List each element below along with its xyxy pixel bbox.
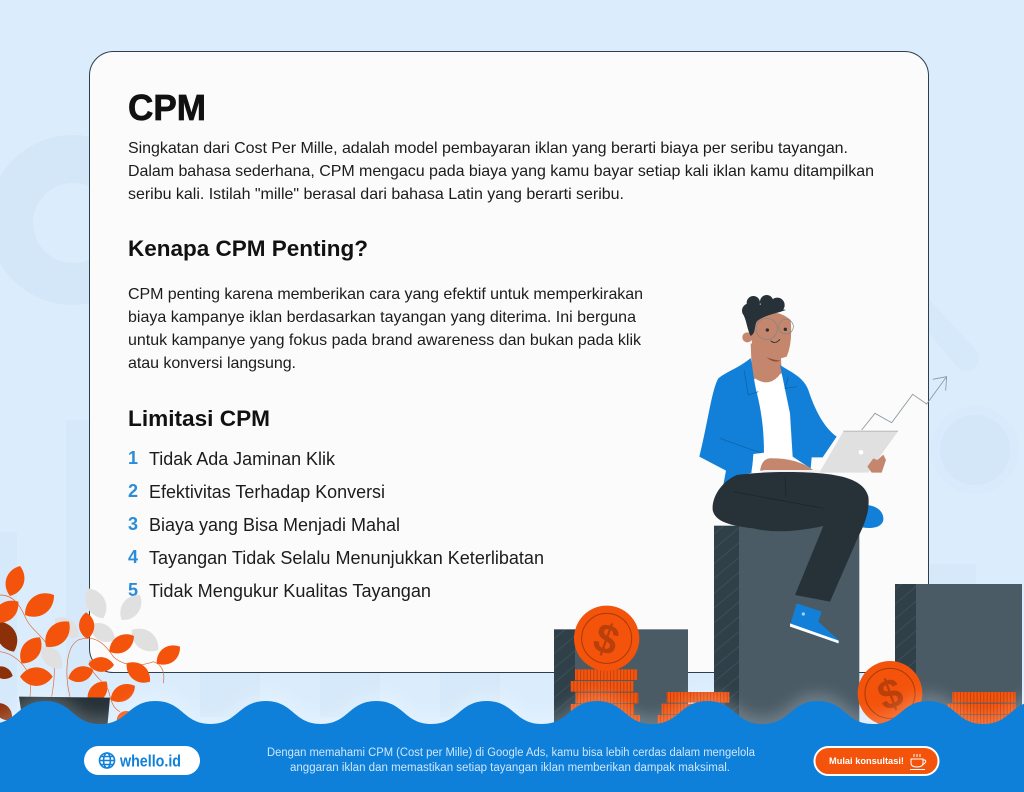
front hand (760, 458, 814, 471)
list: CPM limitations: Tidak Mengukur Kualitas Tayangan (149, 581, 431, 601)
text block: why CPM matters: CPM penting karena memberikan cara yang efektif untuk memperkirakan (128, 286, 643, 303)
coin lower (858, 661, 922, 726)
footer message: anggaran iklan dan memastikan setiap tayangan iklan memberikan dampak maksimal. (290, 762, 730, 774)
coin stack right (947, 692, 1016, 726)
neck (751, 343, 782, 383)
list: CPM limitations: 3 (128, 514, 138, 534)
coin upper: $ (588, 613, 625, 665)
list: CPM limitations: Biaya yang Bisa Menjadi Mahal (149, 515, 400, 535)
text block: CPM definition (128, 140, 874, 203)
heading: Kenapa CPM Penting: Kenapa CPM Penting? (128, 236, 368, 261)
front shoe (790, 603, 838, 643)
glasses (756, 318, 793, 340)
list: CPM limitations: 2 (128, 481, 138, 501)
footer band with wave (0, 701, 1024, 792)
list: CPM limitations: 4 (128, 547, 138, 567)
jacket (699, 358, 764, 488)
shirt (755, 373, 793, 460)
logo pill: whello.id (84, 746, 200, 775)
panel: main card (90, 52, 928, 672)
coin upper (574, 606, 639, 671)
coin lower: $ (871, 668, 909, 720)
arrow: growth line (862, 377, 947, 430)
white cuff (751, 453, 764, 473)
ear (742, 332, 752, 342)
footer message (267, 747, 756, 774)
trousers (713, 472, 869, 602)
head (749, 312, 791, 360)
list: CPM limitations: Efektivitas Terhadap Konversi (149, 482, 385, 502)
middle building (714, 526, 859, 729)
button: Mulai konsultasi (814, 747, 938, 775)
hair (742, 295, 786, 336)
wave glow (0, 693, 1024, 792)
text block: why CPM matters: untuk kampanye yang fokus pada brand awareness dan bukan pada klik (128, 332, 642, 349)
heading: Limitasi CPM: Limitasi CPM (128, 406, 270, 431)
text block: why CPM matters (128, 286, 643, 372)
list: CPM limitations: 1 (128, 448, 138, 468)
dark leaves (0, 618, 23, 725)
back hand (867, 455, 886, 473)
grey back leaves (35, 584, 164, 674)
text block: CPM definition: seribu kali. Istilah "mille" berasal dari bahasa Latin yang berarti seribu. (128, 186, 624, 203)
text block: CPM definition: Singkatan dari Cost Per Mille, adalah model pembayaran iklan yang berarti biaya per seribu tayangan. (128, 140, 848, 157)
illustration: buildings, coins and person (554, 295, 1022, 729)
coin stack left (571, 669, 640, 726)
icon: coffee cup (910, 754, 926, 770)
person (699, 295, 898, 643)
eyes and mouth (766, 328, 787, 361)
plant pot (19, 697, 110, 727)
laptop (763, 431, 898, 473)
text block: why CPM matters: atau konversi langsung. (128, 355, 296, 372)
footer message: Dengan memahami CPM (Cost per Mille) di Google Ads, kamu bisa lebih cerdas dalam mengelola (267, 747, 756, 759)
left building (554, 629, 688, 729)
list: CPM limitations: Tidak Ada Jaminan Klik (149, 449, 336, 469)
button: Mulai konsultasi: Mulai konsultasi! (829, 756, 904, 767)
text block: CPM definition: Dalam bahasa sederhana, CPM mengacu pada biaya yang kamu bayar setiap kali iklan kamu ditampilkan (128, 163, 874, 180)
list: CPM limitations (128, 448, 544, 601)
list: CPM limitations: Tayangan Tidak Selalu Menunjukkan Keterlibatan (149, 548, 544, 568)
orange leaves (0, 563, 185, 725)
plant stems (0, 595, 164, 712)
title: CPM (128, 87, 206, 128)
logo pill: whello.id: whello.id (119, 752, 181, 770)
coin stack middle (658, 692, 729, 726)
text block: why CPM matters: biaya kampanye iklan berdasarkan tayangan yang diterima. Ini berguna (128, 309, 636, 326)
right building (895, 584, 1022, 727)
list: CPM limitations: 5 (128, 580, 138, 600)
back shoe (858, 505, 883, 528)
icon: globe (100, 753, 114, 768)
illustration: plant (0, 563, 185, 727)
faded background chart decorations (0, 135, 1019, 717)
